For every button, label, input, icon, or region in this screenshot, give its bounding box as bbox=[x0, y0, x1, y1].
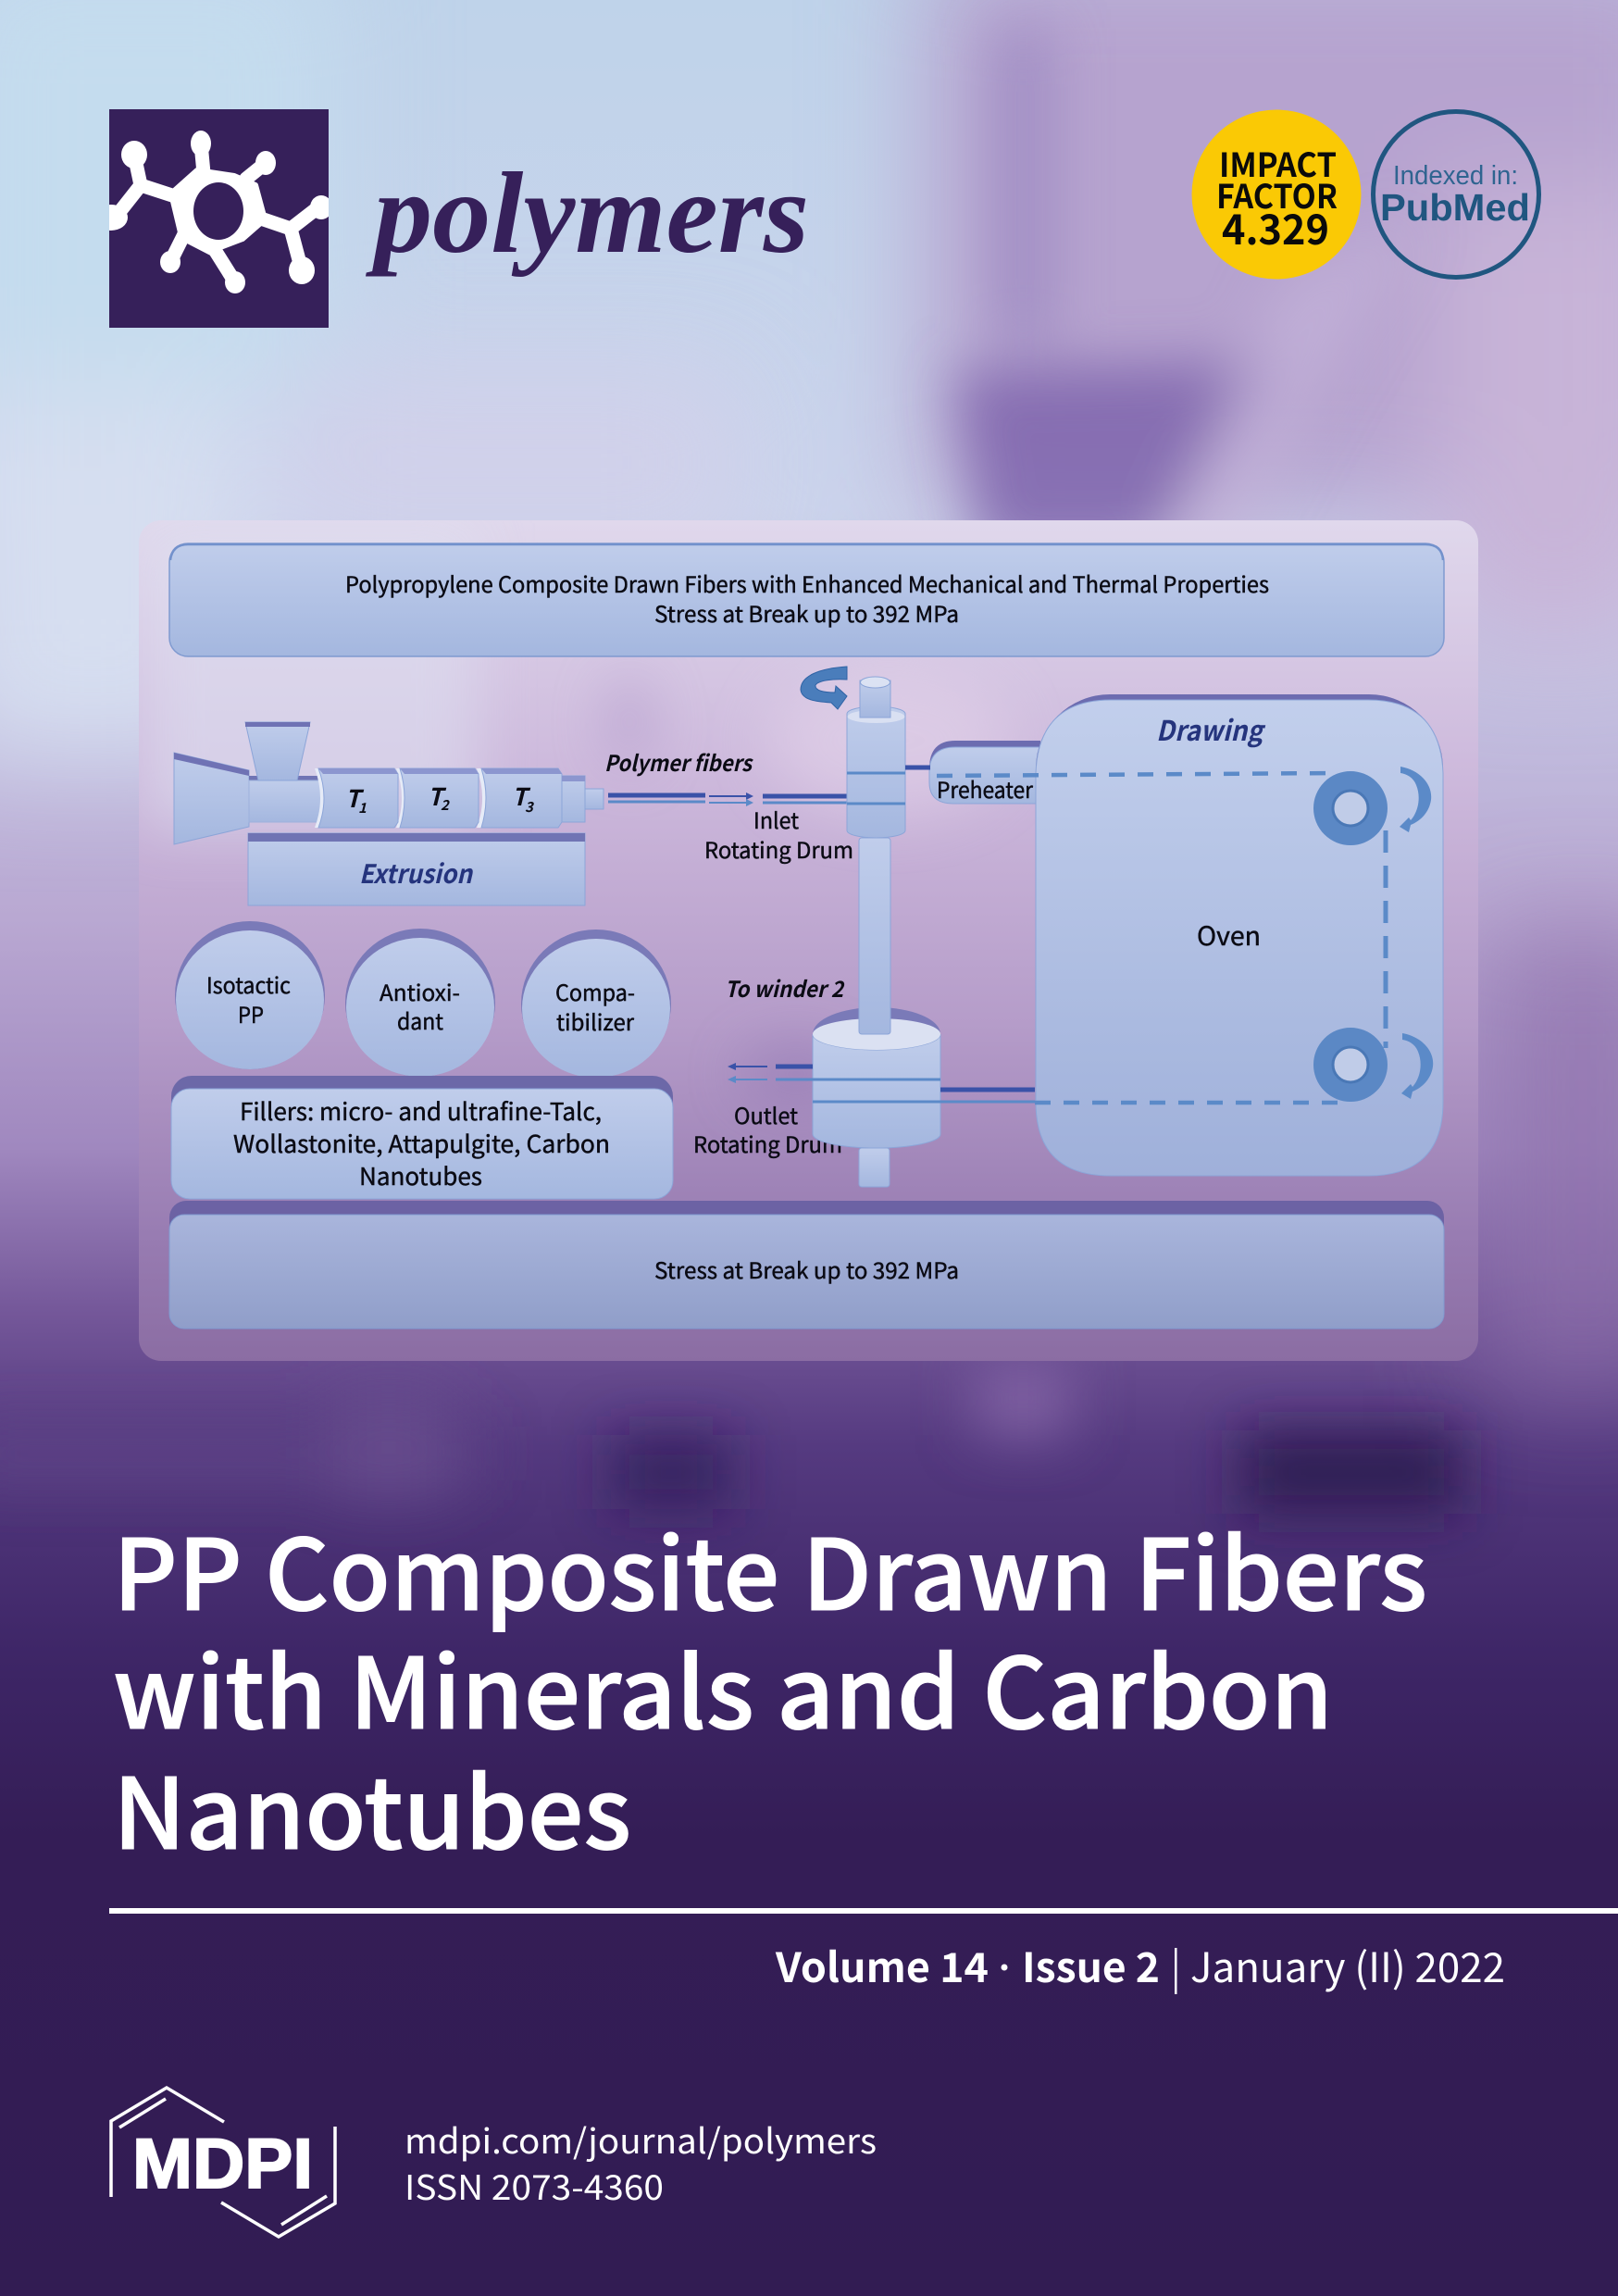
panel: process diagram bbox=[139, 520, 1478, 1361]
upper roller bbox=[1323, 780, 1378, 836]
article title: with Minerals and Carbon bbox=[113, 1615, 1333, 1757]
issue information: January (II) 2022 bbox=[1190, 1935, 1505, 1994]
MDPI logo: MDPI bbox=[132, 2125, 313, 2203]
oven: Drawing bbox=[1156, 708, 1266, 749]
title rule bbox=[109, 1908, 1618, 1914]
impact factor badge: FACTOR bbox=[1216, 170, 1338, 218]
issue information bbox=[775, 1935, 1505, 1994]
outlet rotating drum label: Rotating Drum bbox=[693, 1127, 842, 1159]
result box bbox=[169, 1201, 1444, 1329]
temperature zone labels: 2 bbox=[441, 795, 450, 815]
temperature zone labels: 1 bbox=[358, 798, 367, 817]
additive: antioxidant: dant bbox=[397, 1004, 443, 1036]
issue information: Issue 2 bbox=[1022, 1935, 1160, 1994]
fiber path through oven bbox=[937, 773, 1386, 1103]
to winder label: To winder 2 bbox=[725, 971, 845, 1004]
PubMed badge bbox=[1374, 111, 1538, 278]
temperature zone labels: T bbox=[345, 780, 365, 815]
outlet rotating drum label bbox=[693, 1098, 842, 1159]
fillers box: Wollastonite, Attapulgite, Carbon bbox=[233, 1126, 610, 1160]
polymer fibers line and arrows bbox=[604, 745, 848, 806]
journal name: polymers bbox=[366, 150, 809, 278]
outlet rotating drum label: Outlet bbox=[734, 1098, 798, 1130]
MDPI logo bbox=[111, 2088, 335, 2237]
journal url and ISSN: mdpi.com/journal/polymers bbox=[404, 2114, 877, 2164]
PubMed badge: Indexed in: bbox=[1393, 161, 1518, 191]
outlet shaft and drum bbox=[813, 1007, 940, 1187]
header box bbox=[169, 543, 1444, 656]
preheater bbox=[905, 741, 1040, 804]
inlet shaft and drum bbox=[847, 677, 905, 1034]
rotation arrow bbox=[801, 667, 847, 709]
upper roller rotation arrow bbox=[1400, 767, 1431, 832]
inlet rotating drum label: Rotating Drum bbox=[704, 832, 853, 865]
impact factor badge bbox=[1192, 109, 1361, 280]
impact factor badge: IMPACT bbox=[1219, 139, 1337, 187]
fillers box bbox=[171, 1076, 673, 1199]
additive: compatibilizer: tibilizer bbox=[556, 1004, 635, 1037]
additive: compatibilizer: Compa- bbox=[555, 975, 635, 1007]
article title: Nanotubes bbox=[113, 1735, 631, 1878]
additive: antioxidant: Antioxi- bbox=[380, 975, 460, 1007]
PubMed badge: PubMed bbox=[1380, 186, 1530, 229]
extrusion base box bbox=[248, 833, 585, 905]
header box: Polypropylene Composite Drawn Fibers with Enhanced Mechanical and Thermal Properties bbox=[345, 567, 1269, 599]
additive: compatibilizer bbox=[521, 930, 671, 1078]
fillers box: Fillers: micro- and ultrafine-Talc, bbox=[240, 1093, 602, 1128]
inlet rotating drum label: Inlet bbox=[753, 803, 799, 835]
impact factor badge: 4.329 bbox=[1222, 196, 1329, 256]
additive: isotactic PP bbox=[175, 921, 325, 1069]
additive: isotactic PP: Isotactic bbox=[206, 967, 291, 1000]
polymer fibers line and arrows: Polymer fibers bbox=[604, 745, 753, 778]
article title bbox=[113, 1496, 1427, 1878]
inlet rotating drum label bbox=[704, 803, 853, 865]
article title: PP Composite Drawn Fibers bbox=[113, 1496, 1427, 1639]
temperature zone labels: T bbox=[428, 779, 447, 813]
lower roller rotation arrow bbox=[1401, 1033, 1433, 1099]
temperature zone labels: T bbox=[512, 779, 531, 813]
extruder bbox=[174, 722, 604, 844]
temperature zone labels bbox=[345, 779, 535, 817]
journal url and ISSN bbox=[404, 2114, 877, 2210]
oven bbox=[1036, 694, 1443, 1176]
additive: antioxidant bbox=[345, 929, 495, 1077]
outlet arrows to winder bbox=[728, 1063, 813, 1083]
preheater label: Preheater bbox=[937, 772, 1034, 805]
lower roller bbox=[1323, 1037, 1378, 1092]
extrusion base box: Extrusion bbox=[359, 855, 474, 892]
issue information: Volume 14 bbox=[775, 1935, 989, 1994]
additive: isotactic PP: PP bbox=[238, 997, 264, 1029]
result box: Stress at Break up to 392 MPa bbox=[654, 1253, 959, 1285]
fillers box: Nanotubes bbox=[359, 1158, 482, 1192]
journal logo square bbox=[94, 109, 332, 328]
header box: Stress at Break up to 392 MPa bbox=[654, 596, 959, 629]
journal url and ISSN: ISSN 2073-4360 bbox=[404, 2160, 664, 2210]
temperature zone labels: 3 bbox=[525, 797, 535, 817]
oven: Oven bbox=[1197, 917, 1261, 954]
